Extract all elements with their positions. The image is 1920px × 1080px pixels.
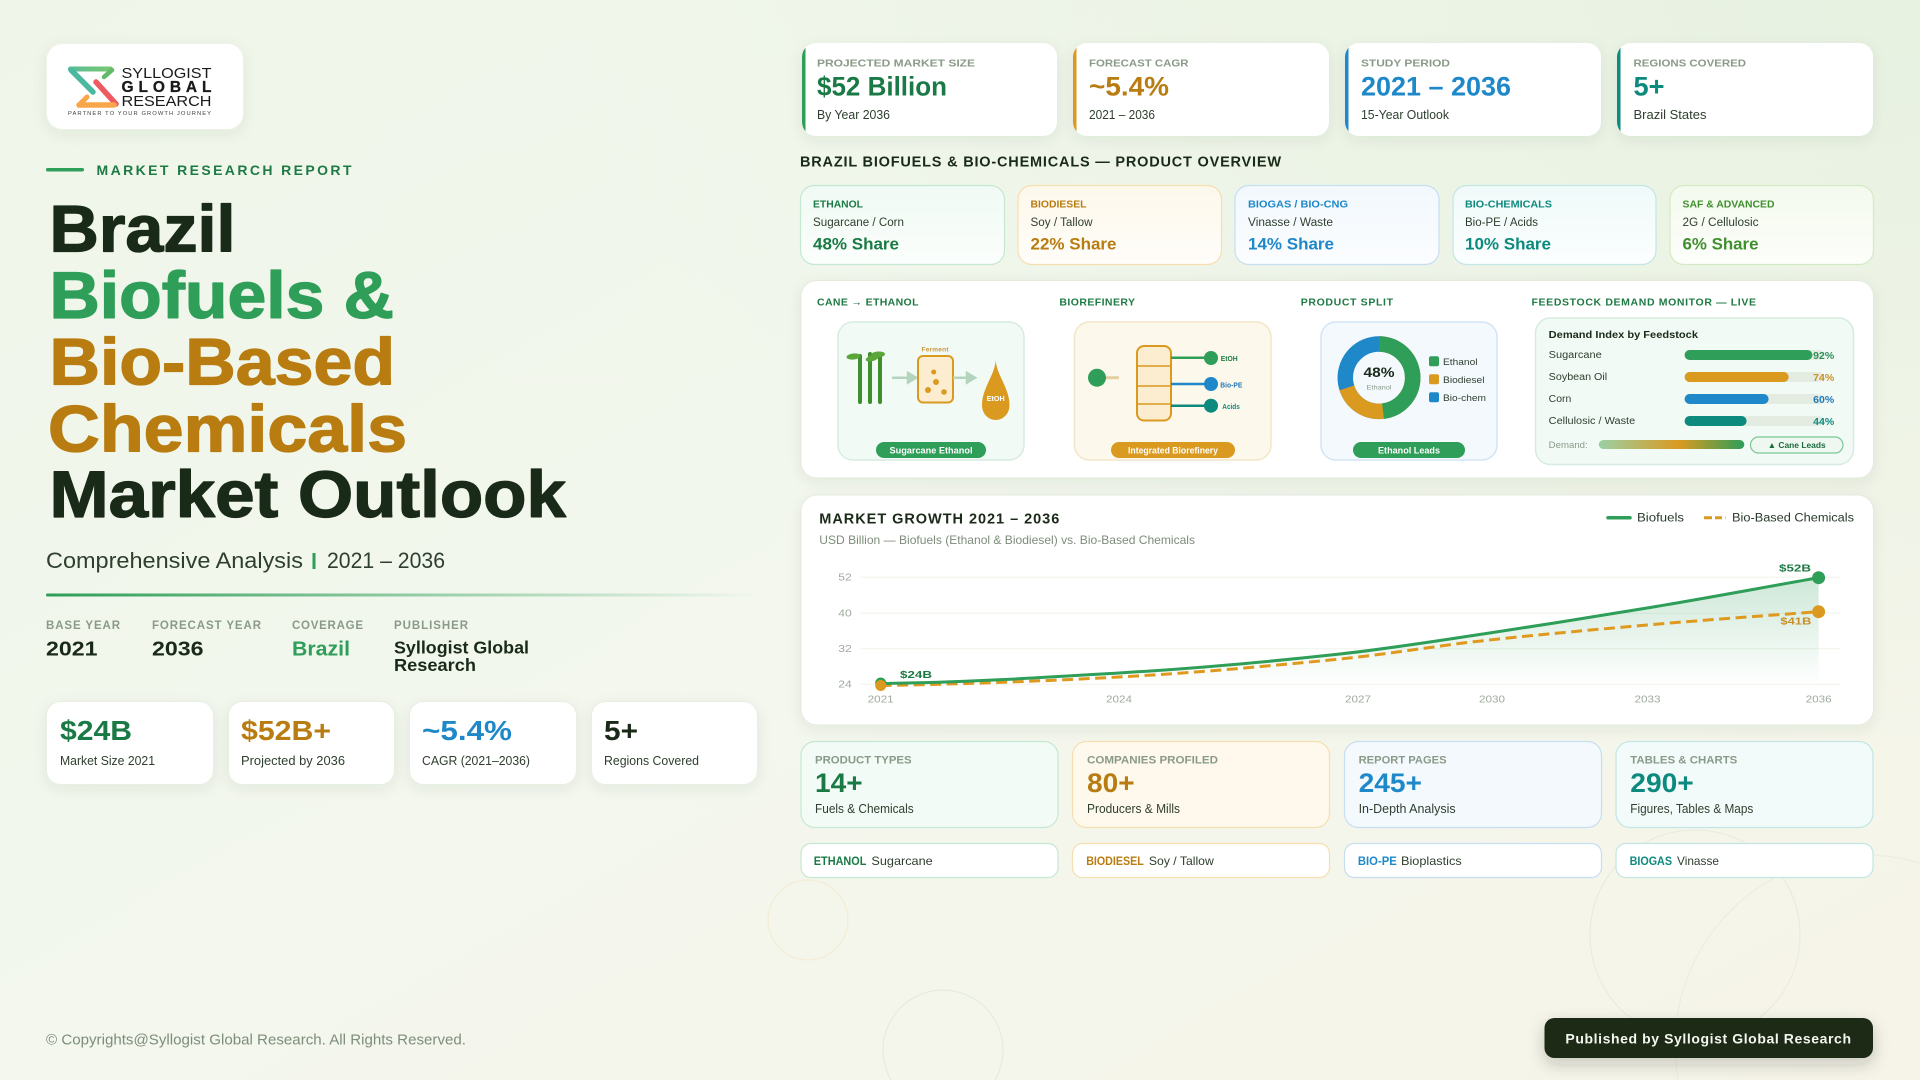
top stat: regions covered (1617, 43, 1873, 136)
chip: biogas vinasse: BIOGAS (1630, 854, 1672, 868)
pill: cane leads (1750, 437, 1843, 453)
title: Market Outlook (50, 457, 566, 531)
top stat: forecast CAGR: ~5.4% (1089, 72, 1169, 102)
product card: SAF and advanced: 6% Share (1682, 235, 1758, 253)
product card: biodiesel: Soy / Tallow (1030, 217, 1093, 229)
KPI card: market size: Market Size 2021 (60, 753, 155, 768)
logo text: GLOBAL (122, 79, 212, 96)
donut legend (1429, 356, 1486, 404)
bar: corn: 60% (1813, 395, 1834, 406)
title: Chemicals (48, 392, 407, 466)
icon: fermenter: Ferment (922, 347, 949, 354)
meta: forecast year (152, 620, 262, 661)
x axis labels (868, 694, 1832, 705)
chart legend: Bio-Based Chemicals (1732, 513, 1854, 525)
KPI card: CAGR: CAGR (2021–2036) (422, 753, 530, 768)
arrow: cane to fermenter (892, 373, 916, 382)
product card: biogas: 14% Share (1248, 235, 1334, 253)
bar: sugarcane: 92% (1813, 351, 1834, 362)
donut centre value: Ethanol (1366, 385, 1392, 392)
stat card: companies profiled (1072, 742, 1330, 828)
chart subtitle: USD Billion — Biofuels (Ethanol & Biodiesel) vs. Bio-Based Chemicals (819, 533, 1195, 547)
chip: bio-pe bioplastics (1344, 844, 1602, 878)
bar: corn (1549, 394, 1834, 406)
bar: sugarcane: Sugarcane (1549, 350, 1602, 361)
output: Bio-PE (1171, 377, 1243, 391)
stat card: product types: 14+ (815, 768, 863, 798)
top stat: study period: STUDY PERIOD (1361, 58, 1450, 70)
top stat: regions covered: REGIONS COVERED (1634, 58, 1746, 70)
x axis labels: 2030 (1479, 694, 1506, 705)
product card: bio-chemicals (1453, 186, 1656, 264)
logo card (46, 44, 244, 130)
top stat: projected market size: By Year 2036 (817, 107, 890, 122)
logo text: RESEARCH (122, 94, 212, 110)
KPI card: projected: $52B+ (241, 715, 331, 746)
stat card: tables and charts: TABLES & CHARTS (1630, 755, 1737, 767)
eyebrow label: MARKET RESEARCH REPORT (96, 162, 352, 178)
product card: ethanol: ETHANOL (813, 199, 864, 211)
subtitle: 2021 – 2036 (327, 548, 445, 573)
line: biofuels (881, 578, 1819, 684)
output: Acids (1171, 399, 1240, 413)
stat card: tables and charts: 290+ (1630, 768, 1694, 798)
icon: logo mark (68, 66, 116, 105)
chart: product split donut (1321, 322, 1497, 460)
top stat: study period: 2021 – 2036 (1361, 72, 1511, 102)
output: EtOH: EtOH (1221, 356, 1238, 363)
top stat: forecast CAGR: FORECAST CAGR (1089, 58, 1189, 70)
output: Bio-PE: Bio-PE (1220, 382, 1243, 390)
product card: ethanol: 48% Share (813, 235, 899, 253)
stat card: companies profiled: Producers & Mills (1087, 801, 1180, 816)
x axis labels: 2036 (1806, 694, 1832, 705)
meta: publisher (394, 620, 529, 675)
product card: SAF and advanced (1670, 186, 1874, 264)
meta: coverage: Brazil (292, 638, 350, 661)
copyright footer: © Copyrights@Syllogist Global Research. All Rights Reserved. (46, 1032, 466, 1048)
icon: fermenter (918, 347, 953, 402)
line: bio-based chemicals (881, 612, 1819, 686)
KPI card: regions: 5+ (604, 715, 638, 746)
donut ring (1345, 344, 1413, 411)
donut centre value (1364, 364, 1395, 392)
heading: biorefinery: BIOREFINERY (1059, 297, 1135, 309)
KPI card: regions: Regions Covered (604, 753, 699, 768)
top stat: study period: 15-Year Outlook (1361, 107, 1449, 122)
stat card: report pages: REPORT PAGES (1359, 755, 1447, 767)
bar: cellulosic: Cellulosic / Waste (1549, 416, 1636, 427)
x axis labels: 2021 (868, 694, 894, 705)
y axis labels: 52 (838, 573, 852, 584)
chart legend (1608, 513, 1854, 525)
meta: forecast year: 2036 (152, 638, 204, 661)
panel: process diagrams and monitor (801, 280, 1874, 478)
bar: sugarcane (1549, 350, 1834, 362)
top stat: projected market size: $52 Billion (817, 72, 947, 102)
stat card: tables and charts: Figures, Tables & Maps (1630, 801, 1754, 816)
pill: integrated biorefinery: Integrated Biorefinery (1128, 446, 1218, 456)
pill: ethanol leads: Ethanol Leads (1378, 446, 1440, 456)
bar: cellulosic: 44% (1813, 417, 1834, 428)
arrow: fermenter to ethanol (953, 373, 975, 382)
icon: sugarcane stalks (846, 351, 885, 402)
x axis labels: 2024 (1106, 694, 1133, 705)
donut centre value: 48% (1364, 364, 1395, 380)
chip: biodiesel soy tallow: Soy / Tallow (1149, 854, 1214, 868)
pill: cane leads: ▲ Cane Leads (1768, 440, 1826, 450)
KPI card: projected: Projected by 2036 (241, 753, 345, 768)
y axis labels (838, 573, 852, 691)
KPI card: market size (46, 702, 214, 784)
meta: publisher: Research (394, 655, 476, 675)
y axis labels: 32 (838, 644, 852, 655)
subtitle (46, 548, 445, 573)
meta: base year: 2021 (46, 638, 98, 661)
product card: biodiesel: 22% Share (1030, 235, 1116, 253)
chip: biodiesel soy tallow (1072, 844, 1330, 878)
pill: ethanol leads (1353, 442, 1465, 458)
data points and value labels: $24B (900, 669, 933, 681)
panel: market growth chart (801, 495, 1874, 725)
heading: product split: PRODUCT SPLIT (1301, 297, 1394, 309)
product card: ethanol (800, 186, 1004, 264)
stat card: product types: PRODUCT TYPES (815, 755, 912, 767)
output: EtOH (1171, 351, 1238, 365)
product card: ethanol: Sugarcane / Corn (813, 217, 904, 229)
monitor: feedstock demand bars (1536, 318, 1854, 464)
chip: bio-pe bioplastics: BIO-PE (1358, 854, 1397, 868)
published-by badge (1544, 1018, 1873, 1058)
stat card: product types (801, 742, 1058, 828)
meta: base year (46, 620, 121, 661)
stat card: product types: Fuels & Chemicals (815, 801, 914, 816)
y axis labels: 40 (838, 609, 852, 620)
top stat: regions covered: 5+ (1634, 72, 1664, 102)
bar: cellulosic (1549, 416, 1834, 428)
product card: biogas: Vinasse / Waste (1248, 217, 1333, 229)
bar: soybean oil: 74% (1813, 373, 1834, 384)
chip: biodiesel soy tallow: BIODIESEL (1086, 854, 1144, 868)
KPI card: regions (592, 702, 758, 784)
top stat: forecast CAGR (1073, 43, 1329, 136)
data points and value labels (875, 562, 1825, 691)
y axis labels: 24 (838, 680, 852, 691)
area under biofuels (881, 578, 1819, 684)
diagram: sugarcane to ethanol (838, 322, 1024, 460)
donut legend: Biodiesel (1443, 375, 1484, 386)
title: Brazil (50, 192, 236, 266)
x axis labels: 2027 (1345, 694, 1372, 705)
top stat: forecast CAGR: 2021 – 2036 (1089, 107, 1155, 122)
subtitle: Comprehensive Analysis (46, 548, 303, 573)
diagram: biorefinery (1074, 322, 1271, 460)
product card: SAF and advanced: SAF & ADVANCED (1682, 199, 1775, 211)
chart legend: Biofuels (1637, 513, 1684, 525)
KPI card: CAGR: ~5.4% (422, 715, 512, 746)
stat card: report pages (1344, 742, 1602, 828)
meta: coverage: COVERAGE (292, 620, 363, 632)
section heading: BRAZIL BIOFUELS & BIO-CHEMICALS — PRODUCT OVERVIEW (800, 155, 1281, 171)
bar: soybean oil (1549, 372, 1834, 384)
pill: sugarcane ethanol: Sugarcane Ethanol (890, 446, 972, 456)
top stat: study period (1345, 43, 1601, 136)
chip: bio-pe bioplastics: Bioplastics (1401, 854, 1462, 868)
top stat: projected market size (802, 43, 1057, 136)
data points and value labels: $52B (1779, 562, 1812, 574)
demand gauge: Demand: (1549, 440, 1588, 451)
logo text: SYLLOGIST (122, 66, 212, 82)
product card: biodiesel (1018, 186, 1222, 264)
pill: integrated biorefinery (1111, 442, 1235, 458)
logo text: PARTNER TO YOUR GROWTH JOURNEY (68, 111, 211, 117)
icon: ethanol drop (982, 360, 1010, 420)
meta: publisher: Syllogist Global (394, 638, 529, 658)
stat card: companies profiled: COMPANIES PROFILED (1087, 755, 1218, 767)
chip: ethanol sugarcane: Sugarcane (871, 854, 933, 868)
heading: cane to ethanol: CANE → ETHANOL (817, 297, 919, 309)
stat card: report pages: 245+ (1359, 768, 1422, 798)
bar: soybean oil: Soybean Oil (1549, 372, 1607, 383)
published-by badge: Published by Syllogist Global Research (1565, 1030, 1851, 1046)
title: Biofuels & (50, 258, 394, 332)
heading: feedstock monitor: FEEDSTOCK DEMAND MONITOR — LIVE (1532, 297, 1756, 309)
icon: feedstock input (1088, 369, 1119, 387)
pill: sugarcane ethanol (876, 442, 986, 458)
chip: ethanol sugarcane: ETHANOL (814, 854, 866, 868)
bar: corn: Corn (1549, 394, 1571, 405)
title (48, 192, 566, 531)
monitor heading: Demand Index by Feedstock (1549, 329, 1698, 341)
icon: ethanol drop: EtOH (987, 394, 1005, 403)
product card: bio-chemicals: BIO-CHEMICALS (1465, 199, 1552, 211)
meta: coverage (292, 620, 363, 661)
meta: publisher: PUBLISHER (394, 620, 469, 632)
stat card: companies profiled: 80+ (1087, 768, 1135, 798)
chip: biogas vinasse (1616, 844, 1873, 878)
chip: biogas vinasse: Vinasse (1677, 854, 1719, 868)
meta row: report facts (46, 620, 529, 675)
top stat: projected market size: PROJECTED MARKET SIZE (817, 58, 975, 70)
x axis labels: 2033 (1634, 694, 1661, 705)
meta: base year: BASE YEAR (46, 620, 121, 632)
product card: SAF and advanced: 2G / Cellulosic (1682, 217, 1759, 229)
meta: forecast year: FORECAST YEAR (152, 620, 262, 632)
chip: ethanol sugarcane (801, 844, 1058, 878)
demand gauge (1549, 440, 1744, 451)
data points and value labels: $41B (1780, 616, 1812, 628)
product card: biodiesel: BIODIESEL (1030, 199, 1087, 211)
KPI card: CAGR (410, 702, 576, 784)
title: Bio-Based (50, 324, 395, 398)
output: Acids: Acids (1222, 404, 1240, 411)
icon: refinery column (1137, 346, 1171, 420)
KPI card: market size: $24B (60, 715, 132, 746)
logo text (68, 66, 212, 117)
donut legend: Bio-chem (1443, 393, 1486, 404)
top stat: regions covered: Brazil States (1634, 107, 1707, 122)
stat card: tables and charts (1616, 742, 1873, 828)
donut legend: Ethanol (1443, 357, 1478, 368)
product card: bio-chemicals: Bio-PE / Acids (1465, 217, 1538, 229)
stat card: report pages: In-Depth Analysis (1359, 801, 1456, 816)
chart title: MARKET GROWTH 2021 – 2036 (819, 512, 1059, 528)
KPI card: projected (228, 702, 394, 784)
product card: biogas: BIOGAS / BIO-CNG (1248, 199, 1348, 211)
product card: bio-chemicals: 10% Share (1465, 235, 1551, 253)
product card: biogas (1235, 186, 1439, 264)
